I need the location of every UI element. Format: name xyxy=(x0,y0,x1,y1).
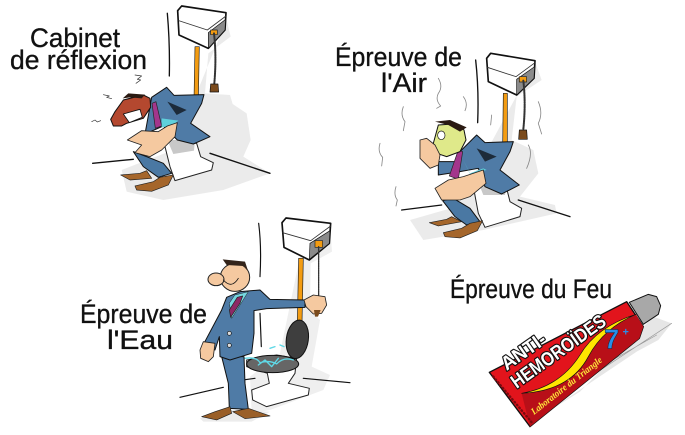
heading: Épreuve de l'Air: l'Air xyxy=(381,68,427,98)
panel: Épreuve de l'Eau xyxy=(80,218,350,422)
panel: Épreuve de l'Air xyxy=(335,42,570,240)
heading: Épreuve de l'Air: Épreuve de xyxy=(335,42,462,72)
heading: Épreuve de l'Eau: l'Eau xyxy=(107,325,173,355)
illustration: red ointment tube xyxy=(489,294,672,427)
heading: Cabinet de réflexion: Cabinet xyxy=(30,23,120,53)
panel: Cabinet de réflexion xyxy=(10,6,270,200)
heading: Épreuve du Feu: Épreuve du Feu xyxy=(450,274,612,304)
panel: Épreuve du Feu xyxy=(450,274,672,427)
illustration: red ointment tube: + xyxy=(623,327,629,339)
illustration: red ointment tube: 7 xyxy=(604,323,619,354)
heading: Cabinet de réflexion xyxy=(10,23,147,75)
heading: Épreuve de l'Eau: Épreuve de xyxy=(80,299,207,329)
heading: Épreuve de l'Eau xyxy=(80,299,207,355)
illustration: red ointment tube: ANTI- xyxy=(497,329,550,375)
illustration: man pulling chain with open toilet xyxy=(180,218,350,422)
illustration: red ointment tube: HEMOROÏDES xyxy=(506,309,611,393)
heading: Cabinet de réflexion: de réflexion xyxy=(10,45,147,75)
illustration: man straining on toilet xyxy=(92,6,270,200)
illustration: man holding nose on toilet xyxy=(379,53,570,240)
heading: Épreuve de l'Air xyxy=(335,42,462,98)
illustration: red ointment tube: Laboratoire du Triangle xyxy=(528,355,605,418)
